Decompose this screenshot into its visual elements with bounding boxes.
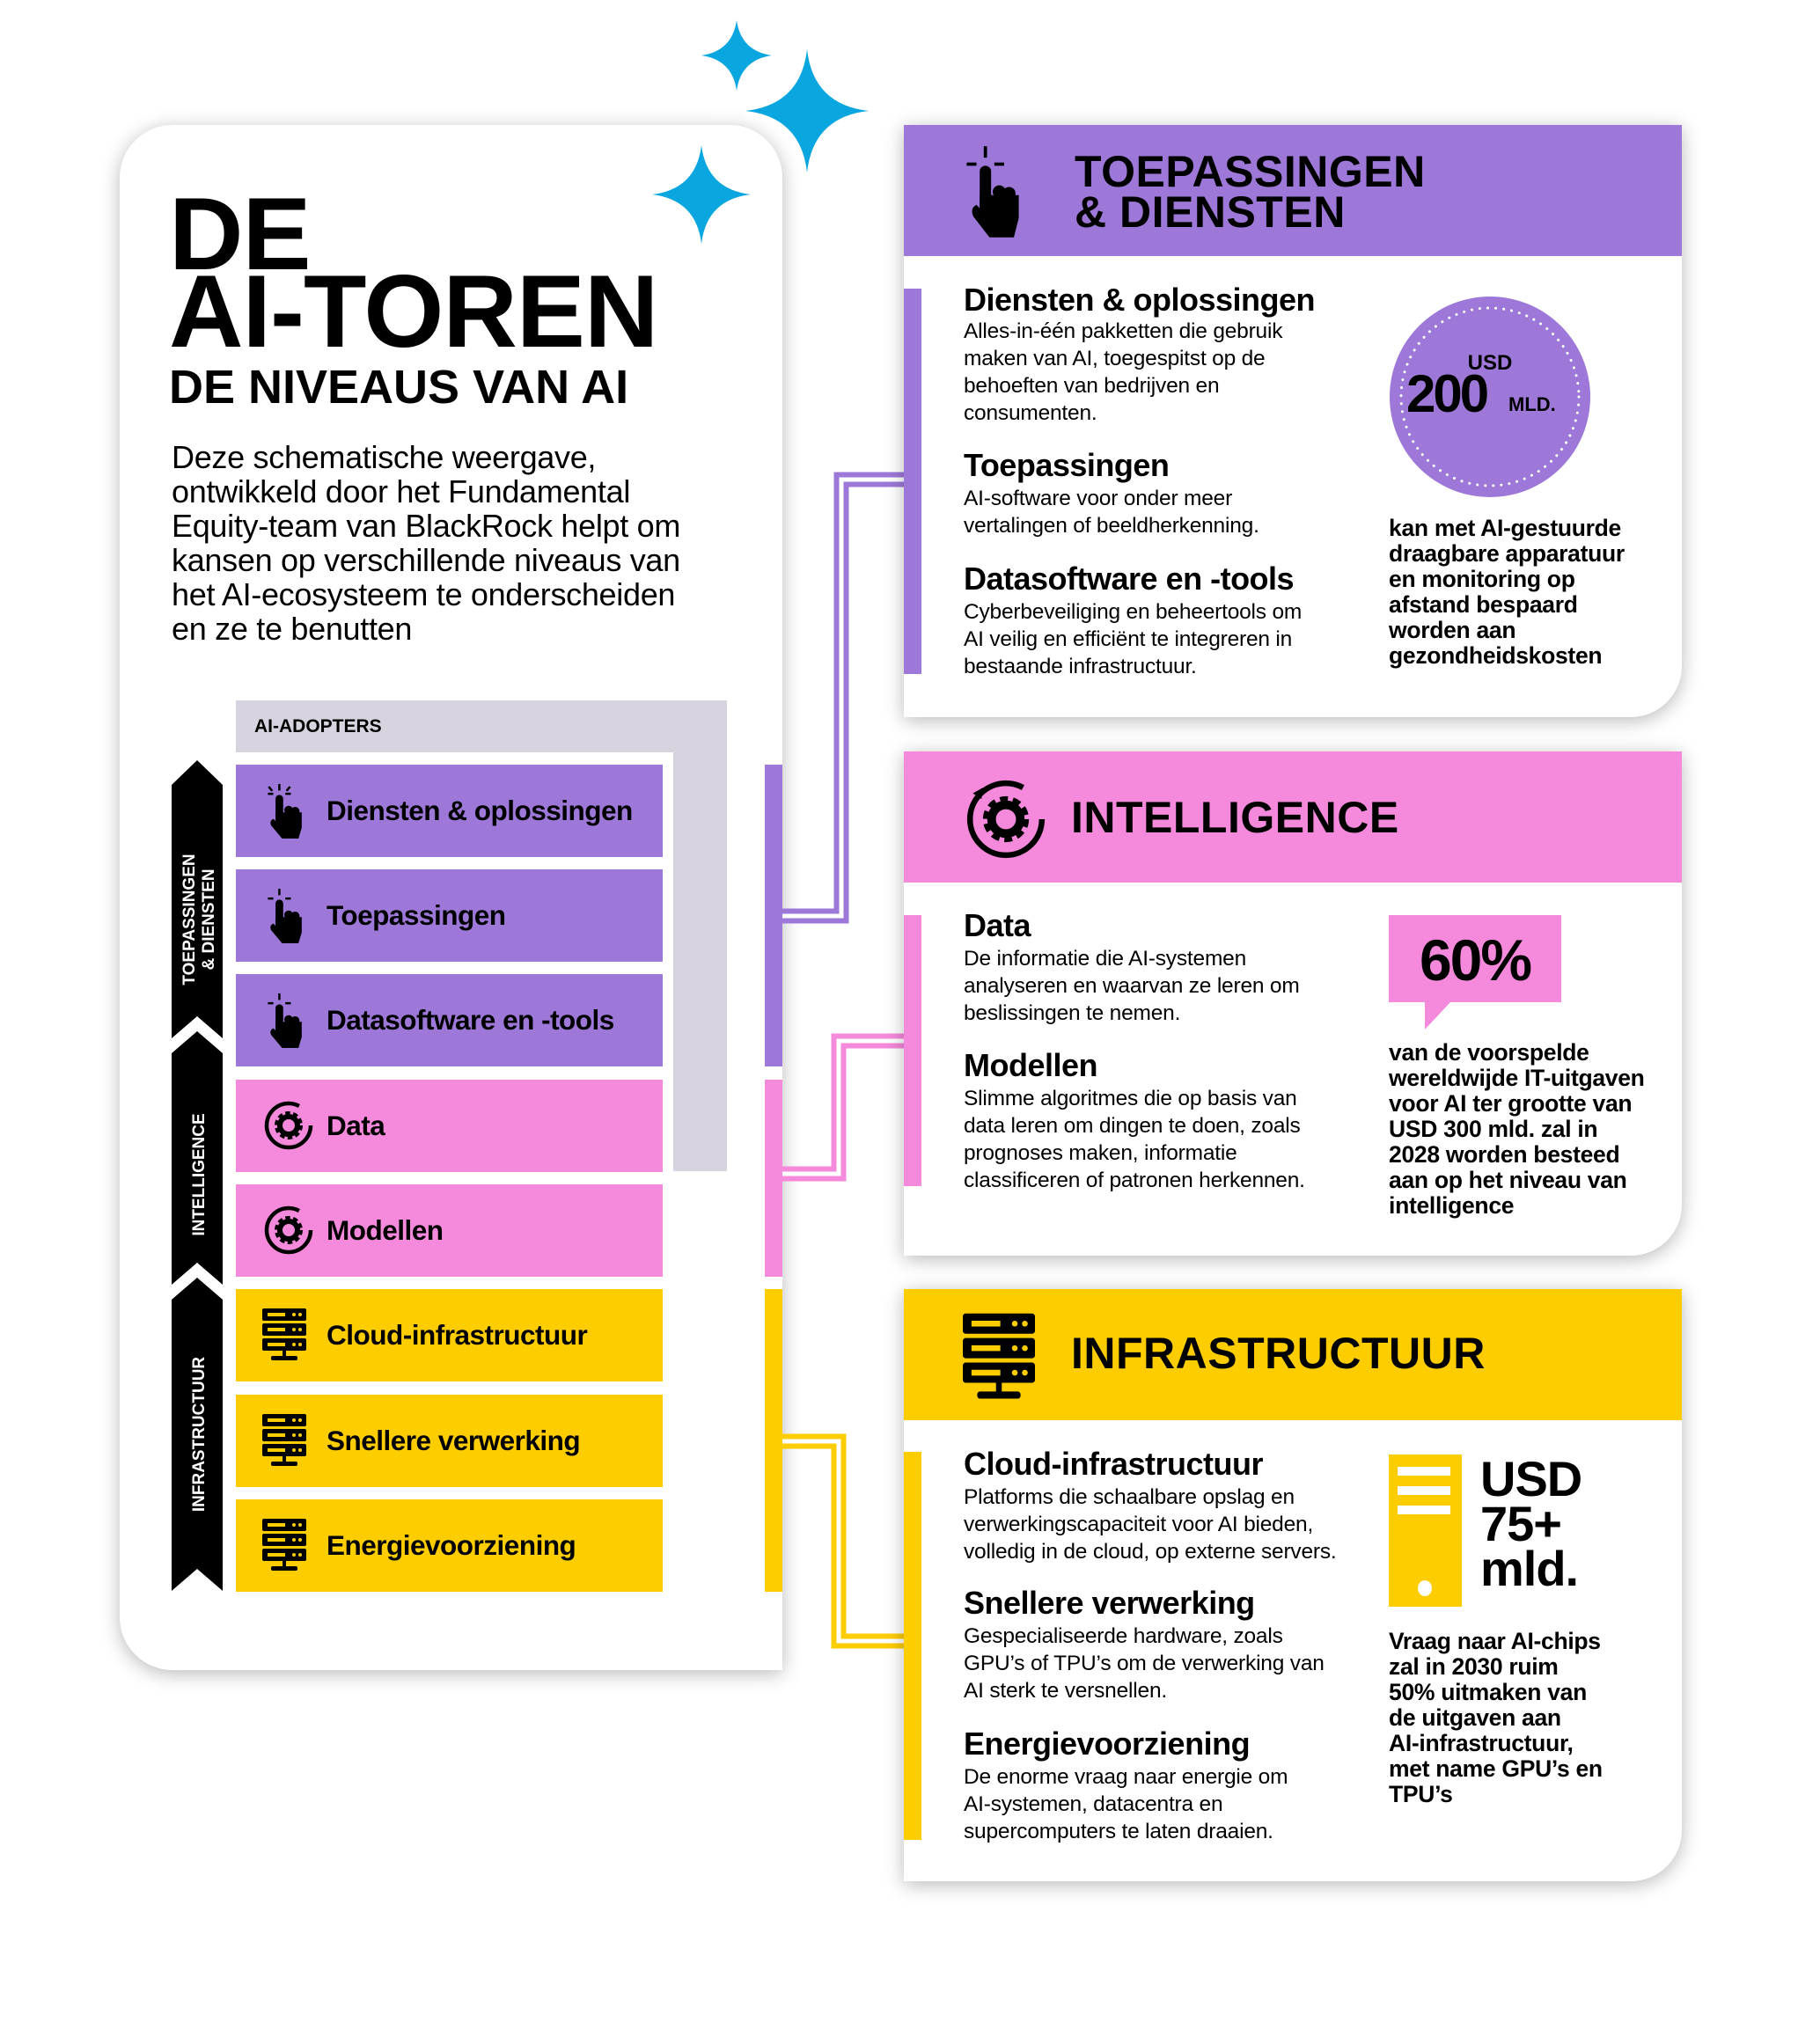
row: Cloud: Cloud-infrastructuur [327, 1319, 587, 1351]
title [169, 176, 657, 414]
intro paragraph: Equity-team van BlackRock helpt om [172, 508, 680, 544]
panel: infrastructuur [904, 1289, 1682, 1881]
row: Toepassingen [236, 869, 663, 962]
row: Toepassingen: Toepassingen [327, 899, 505, 931]
AI-adopters frame: AI-ADOPTERS [254, 716, 382, 736]
panel: infrastructuur: 50% uitmaken van [1389, 1679, 1587, 1705]
panel: infrastructuur: Cloud-infrastructuur [964, 1446, 1263, 1482]
panel: toepassingen & diensten: vertalingen of beeldherkenning. [964, 514, 1259, 538]
panel: infrastructuur: USD [1480, 1451, 1581, 1506]
panel: intelligence: Data [964, 907, 1031, 943]
panel: toepassingen & diensten: afstand bespaard [1389, 591, 1578, 618]
panel: toepassingen & diensten: Datasoftware en -tools [964, 561, 1294, 597]
row: Data: Data [327, 1110, 385, 1141]
icon: hand [966, 146, 1019, 238]
panel: toepassingen & diensten: Toepassingen [964, 447, 1169, 483]
intro paragraph [172, 439, 680, 647]
title: DE NIVEAUS VAN AI [169, 361, 628, 414]
panel: toepassingen & diensten: AI-software voor onder meer [964, 487, 1232, 510]
intro paragraph: en ze te benutten [172, 611, 412, 647]
stars [652, 20, 869, 244]
panel: intelligence: classificeren of patronen herkennen. [964, 1169, 1305, 1192]
title: AI-TOREN [169, 253, 657, 369]
panel: infrastructuur: de uitgaven aan [1389, 1704, 1561, 1731]
panel: toepassingen & diensten: en monitoring op [1389, 566, 1575, 592]
stat circle: 200 [1406, 364, 1487, 423]
panel: intelligence: USD 300 mld. zal in [1389, 1116, 1597, 1142]
icon: gear [966, 780, 1046, 859]
left card: AI tower [120, 125, 782, 1670]
intro paragraph: kansen op verschillende niveaus van [172, 542, 680, 578]
panel: intelligence: Slimme algoritmes die op basis van [964, 1087, 1297, 1110]
row: Datasoftware: Datasoftware en -tools [327, 1004, 614, 1036]
panel: infrastructuur: AI sterk te versnellen. [964, 1679, 1167, 1703]
title: DE [169, 176, 311, 291]
panel: infrastructuur: volledig in de cloud, op externe servers. [964, 1540, 1337, 1564]
panel: infrastructuur: Platforms die schaalbare opslag en [964, 1485, 1295, 1509]
stat circle: USD [1468, 351, 1512, 375]
panel: intelligence: data leren om dingen te doen, zoals [964, 1114, 1301, 1138]
panel: infrastructuur: 75+ [1480, 1496, 1561, 1551]
panel: toepassingen & diensten: draagbare apparatuur [1389, 540, 1625, 567]
header: TOEPASSINGEN [1075, 147, 1426, 196]
row: Modellen [236, 1184, 663, 1277]
panel: toepassingen & diensten: maken van AI, toegespitst op de [964, 347, 1265, 370]
icon: server [963, 1313, 1035, 1399]
accent bar [904, 915, 921, 1186]
panel: infrastructuur: TPU’s [1389, 1781, 1453, 1807]
header [904, 1289, 1682, 1420]
intro paragraph: het AI-ecosysteem te onderscheiden [172, 576, 675, 612]
panel: intelligence: prognoses maken, informatie [964, 1141, 1237, 1165]
row: Energievoorziening [236, 1499, 663, 1592]
panel: intelligence: 2028 worden besteed [1389, 1141, 1619, 1168]
panel: toepassingen & diensten: behoeften van bedrijven en [964, 374, 1219, 398]
level arrows: TOEPASSINGEN [180, 854, 199, 986]
panel: infrastructuur: AI-systemen, datacentra en [964, 1792, 1222, 1816]
panel: intelligence: wereldwijde IT-uitgaven [1389, 1065, 1645, 1091]
panel: intelligence [904, 751, 1682, 1256]
header [904, 125, 1682, 256]
row: Datasoftware [236, 974, 663, 1066]
row: Snellere verwerking [236, 1395, 663, 1487]
panel: toepassingen & diensten: bestaande infrastructuur. [964, 655, 1197, 678]
panel: intelligence: aan op het niveau van [1389, 1167, 1627, 1193]
panel: toepassingen & diensten: Alles-in-één pakketten die gebruik [964, 319, 1282, 343]
callout: 60% [1389, 915, 1561, 1029]
stat circle [1390, 297, 1590, 497]
panel: intelligence: intelligence [1389, 1192, 1514, 1219]
panel: toepassingen & diensten: worden aan [1389, 617, 1515, 643]
panel: intelligence: voor AI ter grootte van [1389, 1090, 1632, 1117]
accent bar [904, 289, 921, 674]
level arrows: & DIENSTEN [200, 868, 218, 971]
AI-adopters frame [236, 700, 727, 1171]
panel: toepassingen & diensten: consumenten. [964, 401, 1097, 425]
panel: intelligence: beslissingen te nemen. [964, 1001, 1180, 1025]
panel: infrastructuur: zal in 2030 ruim [1389, 1653, 1559, 1680]
intro paragraph: Deze schematische weergave, [172, 439, 596, 475]
panel: intelligence: De informatie die AI-systemen [964, 947, 1246, 971]
level arrows [172, 760, 223, 1591]
panel: toepassingen & diensten [904, 125, 1682, 717]
accent bar [904, 1452, 921, 1840]
row: Snellere verwerking: Snellere verwerking [327, 1425, 580, 1456]
row: Diensten & oplossingen [236, 765, 663, 857]
panel: infrastructuur: met name GPU’s en [1389, 1755, 1603, 1782]
row: Cloud [236, 1289, 663, 1381]
panel: toepassingen & diensten: AI veilig en efficiënt te integreren in [964, 627, 1292, 651]
row: Data [236, 1080, 663, 1172]
callout: 60%: 60% [1420, 927, 1530, 993]
panel: infrastructuur: AI-infrastructuur, [1389, 1730, 1574, 1756]
panel: infrastructuur: De enorme vraag naar energie om [964, 1765, 1288, 1789]
stat circle: MLD. [1508, 393, 1556, 415]
level arrows: INFRASTRUCTUUR [190, 1357, 209, 1512]
panel: infrastructuur: Vraag naar AI-chips [1389, 1628, 1601, 1654]
header [904, 751, 1682, 883]
panel: infrastructuur: mld. [1480, 1541, 1578, 1596]
panel: intelligence: analyseren en waarvan ze leren om [964, 974, 1300, 998]
panel: intelligence: van de voorspelde [1389, 1039, 1589, 1066]
text blocks: Diensten & oplossingen [964, 282, 1315, 318]
row: Energievoorziening: Energievoorziening [327, 1529, 576, 1561]
panel: infrastructuur: Gespecialiseerde hardware, zoals [964, 1624, 1283, 1648]
panel: toepassingen & diensten: gezondheidskosten [1389, 642, 1602, 669]
connectors [765, 472, 904, 1649]
header: INTELLIGENCE [1071, 793, 1399, 842]
intro paragraph: ontwikkeld door het Fundamental [172, 473, 630, 509]
row: Diensten & oplossingen: Diensten & oplossingen [327, 795, 633, 826]
icon: server tower [1389, 1454, 1462, 1607]
panel: infrastructuur: Snellere verwerking [964, 1585, 1255, 1621]
row: Modellen: Modellen [327, 1214, 444, 1246]
panel: toepassingen & diensten: Cyberbeveiliging en beheertools om [964, 600, 1302, 624]
header: INFRASTRUCTUUR [1071, 1329, 1486, 1378]
panel: toepassingen & diensten: kan met AI-gestuurde [1389, 515, 1621, 541]
panel: infrastructuur: Energievoorziening [964, 1726, 1250, 1762]
header: & DIENSTEN [1075, 187, 1346, 237]
panel: infrastructuur: verwerkingscapaciteit voor AI bieden, [964, 1513, 1313, 1536]
panel: intelligence: Modellen [964, 1047, 1097, 1083]
panel: infrastructuur: GPU’s of TPU’s om de verwerking van [964, 1652, 1325, 1675]
panel: infrastructuur: supercomputers te laten draaien. [964, 1820, 1273, 1843]
level arrows: INTELLIGENCE [190, 1113, 209, 1236]
